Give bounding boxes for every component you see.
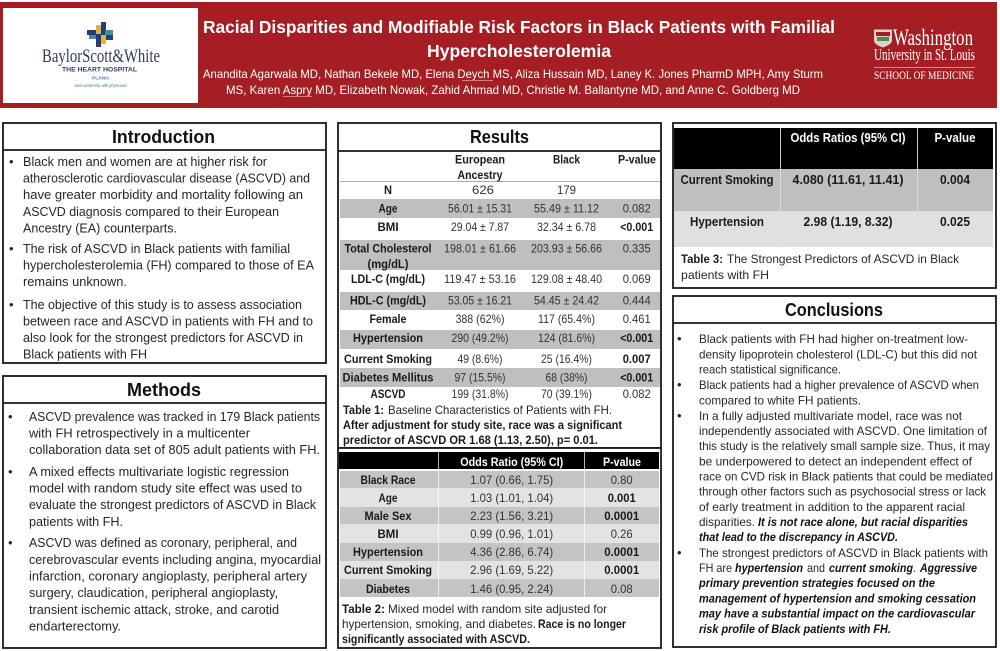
table 2: odds ratios: 0.26 <box>611 527 633 541</box>
table 1: baseline characteristics: 49 (8.6%) <box>458 352 503 366</box>
text block: conclusions bullets: • <box>677 377 682 392</box>
table 1: baseline characteristics: European <box>455 152 505 166</box>
heading: conclusions: Conclusions <box>785 300 883 320</box>
caption: table 2: Race is no longer <box>538 617 626 631</box>
table 1: baseline characteristics: HDL-C (mg/dL) <box>350 294 426 308</box>
table 1: baseline characteristics: 32.34 ± 6.78 <box>537 220 596 234</box>
table 1: baseline characteristics: 56.01 ± 15.31 <box>448 202 512 216</box>
authors: MS, Karen Aspry MD, Elizabeth Nowak, Zahid Ahmad MD, Christie M. Ballantyne MD, and Anne C. Goldberg MD <box>226 83 800 97</box>
text block: introduction bullets: Black men and women are at higher risk for <box>23 155 268 169</box>
panel: mixed model table <box>338 448 661 648</box>
text block: introduction bullets: • <box>9 241 14 256</box>
table 1: baseline characteristics: 198.01 ± 61.66 <box>444 242 516 256</box>
text block: introduction bullets: between race and ASCVD in patients with FH and to <box>23 314 313 328</box>
text block: methods bullets: infarction, coronary angioplasty, peripheral artery <box>29 570 308 584</box>
text block: conclusions bullets: this study is the relatively small sample size. Thus, it may <box>699 439 990 453</box>
text block: methods bullets: ASCVD prevalence was tracked in 179 Black patients <box>29 410 320 424</box>
text block: methods bullets: endarterectomy. <box>29 620 121 634</box>
table 2: odds ratios: Current Smoking <box>344 563 432 577</box>
text block: methods bullets: • <box>8 535 13 550</box>
table 1: baseline characteristics: 97 (15.5%) <box>454 370 506 384</box>
caption: table 1 <box>343 403 622 447</box>
logo: Baylor Scott & White: Joint ownership with physicians <box>73 83 128 88</box>
table 2: odds ratios: 2.96 (1.69, 5.22) <box>470 563 553 577</box>
table 2: odds ratios: 4.36 (2.86, 6.74) <box>470 545 553 559</box>
text block: methods bullets: A mixed effects multivariate logistic regression <box>29 465 289 479</box>
table 1: baseline characteristics: Ancestry <box>458 168 503 182</box>
panel: results <box>338 123 661 448</box>
table 1: baseline characteristics: Female <box>370 312 407 326</box>
table 2: odds ratios: 0.99 (0.96, 1.01) <box>470 527 553 541</box>
table 1: baseline characteristics: 290 (49.2%) <box>452 331 509 345</box>
authors: Anandita Agarwala MD, Nathan Bekele MD, Elena Deych MS, Aliza Hussain MD, Laney K. Jones PharmD MPH, Amy Sturm <box>203 67 823 81</box>
table 1: baseline characteristics: 0.069 <box>623 272 651 286</box>
table 1: baseline characteristics: 54.45 ± 24.42 <box>534 294 599 308</box>
text block: conclusions bullets: density lipoprotein cholesterol (LDL-C) but this did not <box>699 348 978 362</box>
text block: methods bullets: ASCVD was defined as coronary, peripheral, and <box>29 536 297 550</box>
table 1: baseline characteristics: 129.08 ± 48.40 <box>531 272 602 286</box>
text block: conclusions bullets: risk profile of Black patients with FH. <box>699 622 891 636</box>
table 2: odds ratios: P-value <box>603 455 641 469</box>
authors <box>203 67 823 97</box>
text block: methods bullets <box>8 409 321 634</box>
text block: introduction bullets: have greater morbidity and mortality following an <box>23 188 303 202</box>
table 1: baseline characteristics: 0.082 <box>623 387 651 401</box>
text block: introduction bullets: also look for the strongest predictors for ASCVD in <box>23 331 303 345</box>
table 1: baseline characteristics: 53.05 ± 16.21 <box>448 294 512 308</box>
text block: conclusions bullets: FH are <box>699 561 732 575</box>
text block: conclusions bullets: primary prevention strategies focused on the <box>698 576 935 590</box>
table 1: baseline characteristics: <0.001 <box>620 331 654 345</box>
caption: table 3: Table 3: <box>681 252 723 266</box>
caption: table 1: predictor of ASCVD OR 1.68 (1.13, 2.50), p= 0.01. <box>343 433 598 447</box>
table 1: baseline characteristics: Hypertension <box>353 331 423 345</box>
text block: introduction bullets: • <box>9 297 14 312</box>
text block: introduction bullets: remains unknown. <box>23 275 127 289</box>
text block: conclusions bullets: Black patients had a higher prevalence of ASCVD when <box>699 378 979 392</box>
panel: introduction <box>3 123 326 363</box>
caption: table 1: After adjustment for study site, race was a significant <box>343 418 622 432</box>
logo: Washington University School of Medicine <box>874 25 975 82</box>
panel: strongest predictors table <box>673 123 996 288</box>
table 1: baseline characteristics: (mg/dL) <box>368 257 409 271</box>
text block: conclusions bullets: reach statistical significance. <box>699 362 841 376</box>
table 2: odds ratios: BMI <box>378 527 398 541</box>
caption: table 1: Table 1: <box>343 403 384 417</box>
title: Hypercholesterolemia <box>427 41 611 61</box>
table 2: odds ratios: 0.001 <box>608 491 636 505</box>
table 1: baseline characteristics: <0.001 <box>620 370 654 384</box>
table 1: baseline characteristics: Current Smoking <box>344 352 432 366</box>
text block: conclusions bullets: disparities. <box>699 515 755 529</box>
table 1: baseline characteristics: Diabetes Mellitus <box>342 370 434 384</box>
text block: conclusions bullets: • <box>677 331 682 346</box>
table 2: odds ratios: Diabetes <box>366 582 410 596</box>
text block: methods bullets: transient ischemic attack, stroke, and carotid <box>29 603 279 617</box>
text block: conclusions bullets: hypertension <box>735 561 803 575</box>
title <box>203 17 835 61</box>
table 2: odds ratios: 1.07 (0.66, 1.75) <box>470 473 553 487</box>
text block: methods bullets: collaboration data set of 805 adult patients with FH. <box>29 443 320 457</box>
table 1: baseline characteristics: ASCVD <box>370 387 406 401</box>
text block: conclusions bullets: and <box>807 561 825 575</box>
text block: conclusions bullets: It is not race alone, but racial disparities <box>758 515 968 529</box>
table 1: baseline characteristics: 68 (38%) <box>546 370 588 384</box>
text block: methods bullets: model with random study site effect was used to <box>29 482 302 496</box>
table 1: baseline characteristics <box>340 152 660 401</box>
table 2: odds ratios <box>339 452 659 597</box>
table 3: odds ratios: 0.004 <box>940 173 970 187</box>
text block: methods bullets: with FH retrospectively in a multicenter <box>28 426 251 440</box>
text block: conclusions bullets <box>677 331 993 636</box>
table 3: odds ratios: 2.98 (1.19, 8.32) <box>804 215 892 229</box>
text block: introduction bullets: hypercholesterolemia (FH) compared to those of EA <box>23 258 315 272</box>
text block: conclusions bullets: current smoking <box>829 561 913 575</box>
table 1: baseline characteristics: BMI <box>378 220 398 234</box>
table 1: baseline characteristics: 179 <box>557 183 576 197</box>
text block: conclusions bullets: race on CVD risk in Black patients that could be mediated <box>699 470 993 484</box>
text block: methods bullets: cerebrovascular events including angina, myocardial <box>29 553 321 567</box>
table 1: baseline characteristics: Black <box>553 152 580 166</box>
table 1: baseline characteristics: 388 (62%) <box>456 312 505 326</box>
text block: conclusions bullets: independently associated with ASCVD. One limitation of <box>699 424 988 438</box>
table 1: baseline characteristics: 117 (65.4%) <box>538 312 595 326</box>
table 2: odds ratios: Black Race <box>360 473 416 487</box>
panel: conclusions <box>673 296 996 647</box>
table 2: odds ratios: 2.23 (1.56, 3.21) <box>470 509 553 523</box>
text block: conclusions bullets: In a fully adjusted multivariate model, race was not <box>699 409 963 423</box>
table 1: baseline characteristics: 124 (81.6%) <box>538 331 595 345</box>
text block: methods bullets: evaluate the strongest predictors of ASCVD in Black <box>29 498 317 512</box>
table 1: baseline characteristics: LDL-C (mg/dL) <box>351 272 425 286</box>
table 3: odds ratios: P-value <box>934 131 976 145</box>
caption: table 1: Baseline Characteristics of Patients with FH. <box>388 403 612 417</box>
text block: methods bullets: • <box>8 409 13 424</box>
text block: conclusions bullets: of early treatment in addition to the apparent racial <box>699 500 965 514</box>
table 2: odds ratios: 0.08 <box>611 582 633 596</box>
text block: conclusions bullets: The strongest predictors of ASCVD in Black patients with <box>699 546 988 560</box>
table 1: baseline characteristics: 70 (39.1%) <box>541 387 592 401</box>
text block: conclusions bullets: management of hypertension and smoking cessation <box>699 592 976 606</box>
text block: introduction bullets: atherosclerotic cardiovascular disease (ASCVD) and <box>23 172 310 186</box>
text block: conclusions bullets: may have a substantial impact on the cardiovascular <box>699 606 976 620</box>
caption: table 3: The Strongest Predictors of ASCVD in Black <box>727 252 960 266</box>
caption: table 2 <box>342 602 626 646</box>
caption: table 2: Table 2: <box>342 602 385 616</box>
caption: table 3 <box>681 252 960 282</box>
table 2: odds ratios: Male Sex <box>364 509 412 523</box>
logo: Baylor Scott & White <box>3 8 198 103</box>
table 3: odds ratios <box>674 128 993 247</box>
table 2: odds ratios: Hypertension <box>353 545 423 559</box>
text block: introduction bullets: • <box>9 154 14 169</box>
heading: introduction: Introduction <box>112 127 215 147</box>
header banner <box>0 2 997 108</box>
table 1: baseline characteristics: 626 <box>472 183 494 197</box>
table 2: odds ratios: 0.0001 <box>604 509 640 523</box>
caption: table 2: Mixed model with random site adjusted for <box>388 602 607 616</box>
table 1: baseline characteristics: 203.93 ± 56.66 <box>531 242 602 256</box>
table 1: baseline characteristics: 55.49 ± 11.12 <box>534 202 599 216</box>
table 2: odds ratios: 0.0001 <box>604 563 640 577</box>
text block: introduction bullets <box>9 154 315 362</box>
text block: conclusions bullets: compared to white FH patients. <box>699 394 861 408</box>
text block: conclusions bullets: • <box>677 545 682 560</box>
text block: introduction bullets: The objective of this study is to assess association <box>23 298 302 312</box>
caption: table 2: significantly associated with ASCVD. <box>342 632 530 646</box>
text block: conclusions bullets: Aggressive <box>919 561 977 575</box>
text block: methods bullets: • <box>8 464 13 479</box>
table 1: baseline characteristics: 25 (16.4%) <box>541 352 592 366</box>
text block: conclusions bullets: that lead to the discrepancy in ASCVD. <box>699 530 898 544</box>
text block: conclusions bullets: through other factors such as psychosocial stress or lack <box>699 484 987 498</box>
table 1: baseline characteristics: 0.082 <box>623 202 651 216</box>
caption: table 2: hypertension, smoking, and diabetes. <box>342 617 536 631</box>
table 2: odds ratios: Age <box>378 491 398 505</box>
table 1: baseline characteristics: 119.47 ± 53.16 <box>444 272 516 286</box>
table 2: odds ratios: Odds Ratio (95% CI) <box>460 455 563 469</box>
text block: conclusions bullets: be underpowered to detect an independent effect of <box>699 454 973 468</box>
heading: methods: Methods <box>127 380 201 400</box>
logo: Baylor Scott & White: PLANO <box>92 76 110 80</box>
text block: introduction bullets: Ancestry (EA) counterparts. <box>23 222 177 236</box>
text block: introduction bullets: Black patients with FH <box>23 348 147 362</box>
text block: methods bullets: surgery, claudication, peripheral angioplasty, <box>29 586 278 600</box>
table 3: odds ratios: Current Smoking <box>680 173 774 187</box>
table 1: baseline characteristics: Age <box>378 202 398 216</box>
table 2: odds ratios: 1.46 (0.95, 2.24) <box>470 582 553 596</box>
logo: Baylor Scott & White: THE HEART HOSPITAL <box>62 66 137 74</box>
table 1: baseline characteristics: 199 (31.8%) <box>452 387 509 401</box>
text block: conclusions bullets: • <box>677 408 682 423</box>
table 1: baseline characteristics: N <box>384 183 392 197</box>
logo: Washington University School of Medicine: SCHOOL OF MEDICINE <box>874 70 974 82</box>
table 1: baseline characteristics: 0.335 <box>623 242 651 256</box>
table 2: odds ratios: 0.80 <box>611 473 633 487</box>
table 2: odds ratios: 0.0001 <box>604 545 640 559</box>
table 1: baseline characteristics: 0.444 <box>623 294 651 308</box>
heading: results: Results <box>470 127 529 147</box>
text block: introduction bullets: ASCVD diagnosis compared to their European <box>23 205 279 219</box>
table 1: baseline characteristics: <0.001 <box>620 220 654 234</box>
logo: Baylor Scott & White: BaylorScott&White <box>42 47 160 67</box>
table 1: baseline characteristics: 29.04 ± 7.87 <box>451 220 509 234</box>
text block: conclusions bullets: Black patients with FH had higher on-treatment low- <box>699 332 968 346</box>
table 3: odds ratios: Hypertension <box>690 215 764 229</box>
table 3: odds ratios: Odds Ratios (95% CI) <box>790 131 906 145</box>
title: Racial Disparities and Modifiable Risk Factors in Black Patients with Familial <box>203 17 835 37</box>
table 1: baseline characteristics: 0.007 <box>623 352 651 366</box>
table 1: baseline characteristics: P-value <box>618 152 656 166</box>
text block: methods bullets: patients with FH. <box>29 515 123 529</box>
panel: methods <box>3 376 326 648</box>
table 1: baseline characteristics: 0.461 <box>623 312 651 326</box>
text block: introduction bullets: The risk of ASCVD in Black patients with familial <box>23 242 290 256</box>
table 3: odds ratios: 0.025 <box>940 215 970 229</box>
table 1: baseline characteristics: Total Cholesterol <box>344 242 432 256</box>
text block: conclusions bullets: . <box>913 561 916 575</box>
table 2: odds ratios: 1.03 (1.01, 1.04) <box>470 491 553 505</box>
caption: table 3: patients with FH <box>681 268 769 282</box>
table 3: odds ratios: 4.080 (11.61, 11.41) <box>792 173 904 187</box>
